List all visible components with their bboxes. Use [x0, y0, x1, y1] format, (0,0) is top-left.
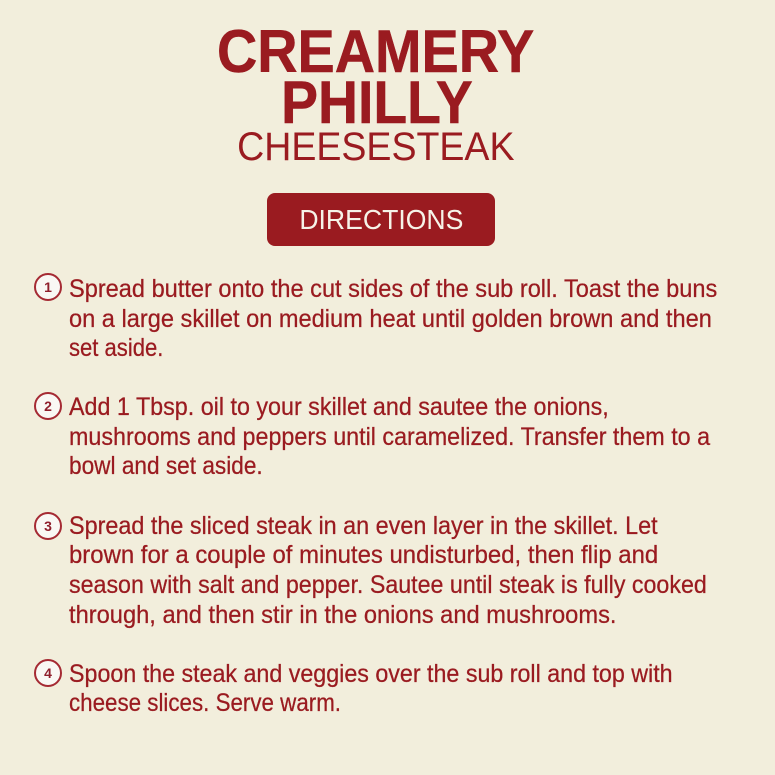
directions badge: DIRECTIONS: [299, 204, 463, 235]
title: [217, 18, 534, 169]
title line: cheesesteak: CHEESESTEAK: [237, 125, 514, 169]
directions badge: [267, 193, 495, 246]
step 4 text: [69, 660, 673, 717]
number 2: [34, 392, 62, 420]
number 2: 2: [44, 398, 52, 414]
step 2 text: mushrooms and peppers until caramelized. Transfer them to a: [69, 423, 710, 451]
number 1: [34, 272, 62, 300]
step 3 text: season with salt and pepper. Sautee until steak is fully cooked: [69, 571, 707, 599]
number 4: 4: [44, 664, 52, 680]
step 1 text: set aside.: [69, 334, 163, 362]
step 4: [34, 659, 673, 717]
step 1 text: Spread butter onto the cut sides of the sub roll. Toast the buns: [69, 275, 717, 303]
step 2 text: Add 1 Tbsp. oil to your skillet and sautee the onions,: [69, 393, 609, 421]
step 2 text: bowl and set aside.: [69, 452, 263, 480]
step 3 text: [69, 512, 707, 628]
step 2: [34, 392, 710, 480]
number 1: 1: [44, 278, 52, 294]
step 3 text: Spread the sliced steak in an even layer in the skillet. Let: [69, 512, 658, 540]
step 4 text: Spoon the steak and veggies over the sub roll and top with: [69, 660, 673, 688]
title line: philly: PHILLY: [281, 68, 473, 136]
step 2 text: [68, 393, 710, 480]
step 4 text: cheese slices. Serve warm.: [69, 689, 341, 717]
title line: creamery: CREAMERY: [217, 18, 534, 84]
step 3 text: through, and then stir in the onions and mushrooms.: [69, 600, 616, 628]
step 1 text: [69, 275, 717, 362]
number 3: 3: [44, 518, 52, 534]
step 1: [34, 273, 717, 362]
step 3 text: brown for a couple of minutes undisturbed, then flip and: [69, 541, 658, 569]
step 3: [34, 512, 707, 628]
number 4: [34, 658, 62, 686]
step 1 text: on a large skillet on medium heat until golden brown and then: [69, 304, 712, 332]
number 3: [34, 512, 62, 540]
